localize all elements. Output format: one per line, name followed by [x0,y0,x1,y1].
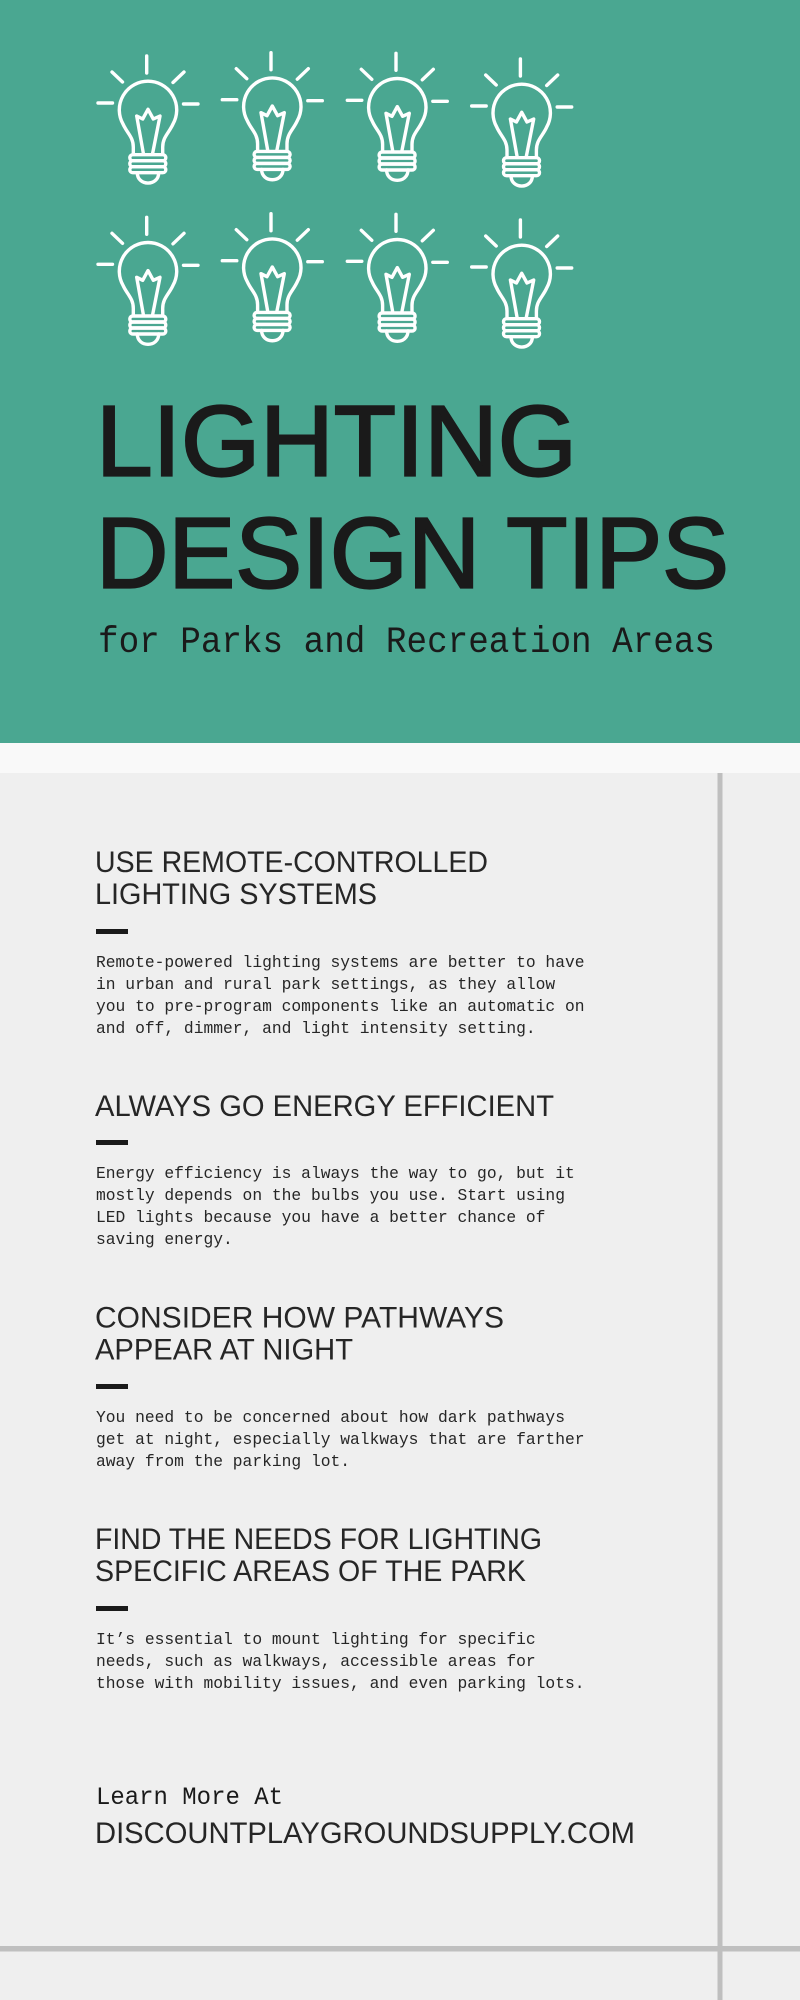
heading: tip 4: FIND THE NEEDS FOR LIGHTING [95,1523,542,1556]
body: tip 3 [96,1408,585,1471]
heading: tip 1 [95,846,488,911]
learn more label: Learn More At [96,1783,283,1812]
body: tip 1: and off, dimmer, and light intensity setting. [96,1019,536,1038]
body: tip 1: in urban and rural park settings, as they allow [96,975,555,994]
panel: tip 1 [95,846,585,1038]
subtitle: for Parks and Recreation Areas [98,622,715,664]
rule [96,1606,128,1611]
vertical grid line [718,773,722,2000]
heading: tip 4 [95,1523,542,1588]
icon: light bulb row 1 col 2 [222,53,322,180]
body: tip 1 [96,953,585,1038]
body: tip 4: those with mobility issues, and even parking lots. [96,1674,585,1693]
heading: tip 2: ALWAYS GO ENERGY EFFICIENT [95,1090,554,1123]
panel: tip 4 [95,1523,585,1693]
body: tip 3: away from the parking lot. [96,1452,350,1471]
rule [96,1140,128,1145]
call to action [95,1783,635,1850]
body: tip 4: needs, such as walkways, accessible areas for [96,1652,536,1671]
white strip below header [0,743,800,773]
body: tip 2: Energy efficiency is always the way to go, but it [96,1164,575,1183]
title: LIGHTING [96,386,577,498]
title [96,386,729,610]
icon: light bulb row 1 col 4 [472,59,572,186]
rule [96,1384,128,1389]
icon: light bulb row 2 col 4 [472,220,572,347]
heading: tip 3: CONSIDER HOW PATHWAYS [95,1302,504,1334]
body: tip 2: LED lights because you have a better chance of [96,1208,545,1227]
heading: tip 1: LIGHTING SYSTEMS [95,878,377,911]
body: tip 2 [96,1164,575,1249]
heading: tip 1: USE REMOTE-CONTROLLED [95,846,488,879]
header background [0,0,800,743]
panel: tip 3 [95,1302,585,1471]
heading: tip 3: APPEAR AT NIGHT [95,1334,353,1366]
panel: green header [0,0,800,743]
body: tip 1: Remote-powered lighting systems are better to have [96,953,585,972]
rule [96,929,128,934]
heading: tip 4: SPECIFIC AREAS OF THE PARK [95,1555,526,1588]
body: tip 4: It’s essential to mount lighting for specific [96,1630,536,1649]
body: tip 3: You need to be concerned about how dark pathways [96,1408,565,1427]
body: tip 4 [96,1630,585,1693]
body: tip 1: you to pre-program components like an automatic on [96,997,585,1016]
body: tip 2: mostly depends on the bulbs you use. Start using [96,1186,565,1205]
panel: tip 2 [95,1090,575,1249]
icon: light bulb row 1 col 1 [98,56,198,183]
title: DESIGN TIPS [96,498,729,610]
heading: tip 3 [95,1302,504,1366]
website: DISCOUNTPLAYGROUNDSUPPLY.COM [95,1817,635,1850]
body: tip 2: saving energy. [96,1230,233,1249]
icon: light bulb row 1 col 3 [347,53,447,180]
icon: light bulb row 2 col 3 [347,214,447,341]
icon: light bulb row 2 col 1 [98,217,198,344]
body: tip 3: get at night, especially walkways that are farther [96,1430,585,1449]
horizontal grid line [0,1946,800,1952]
icon: light bulb row 2 col 2 [222,214,322,341]
